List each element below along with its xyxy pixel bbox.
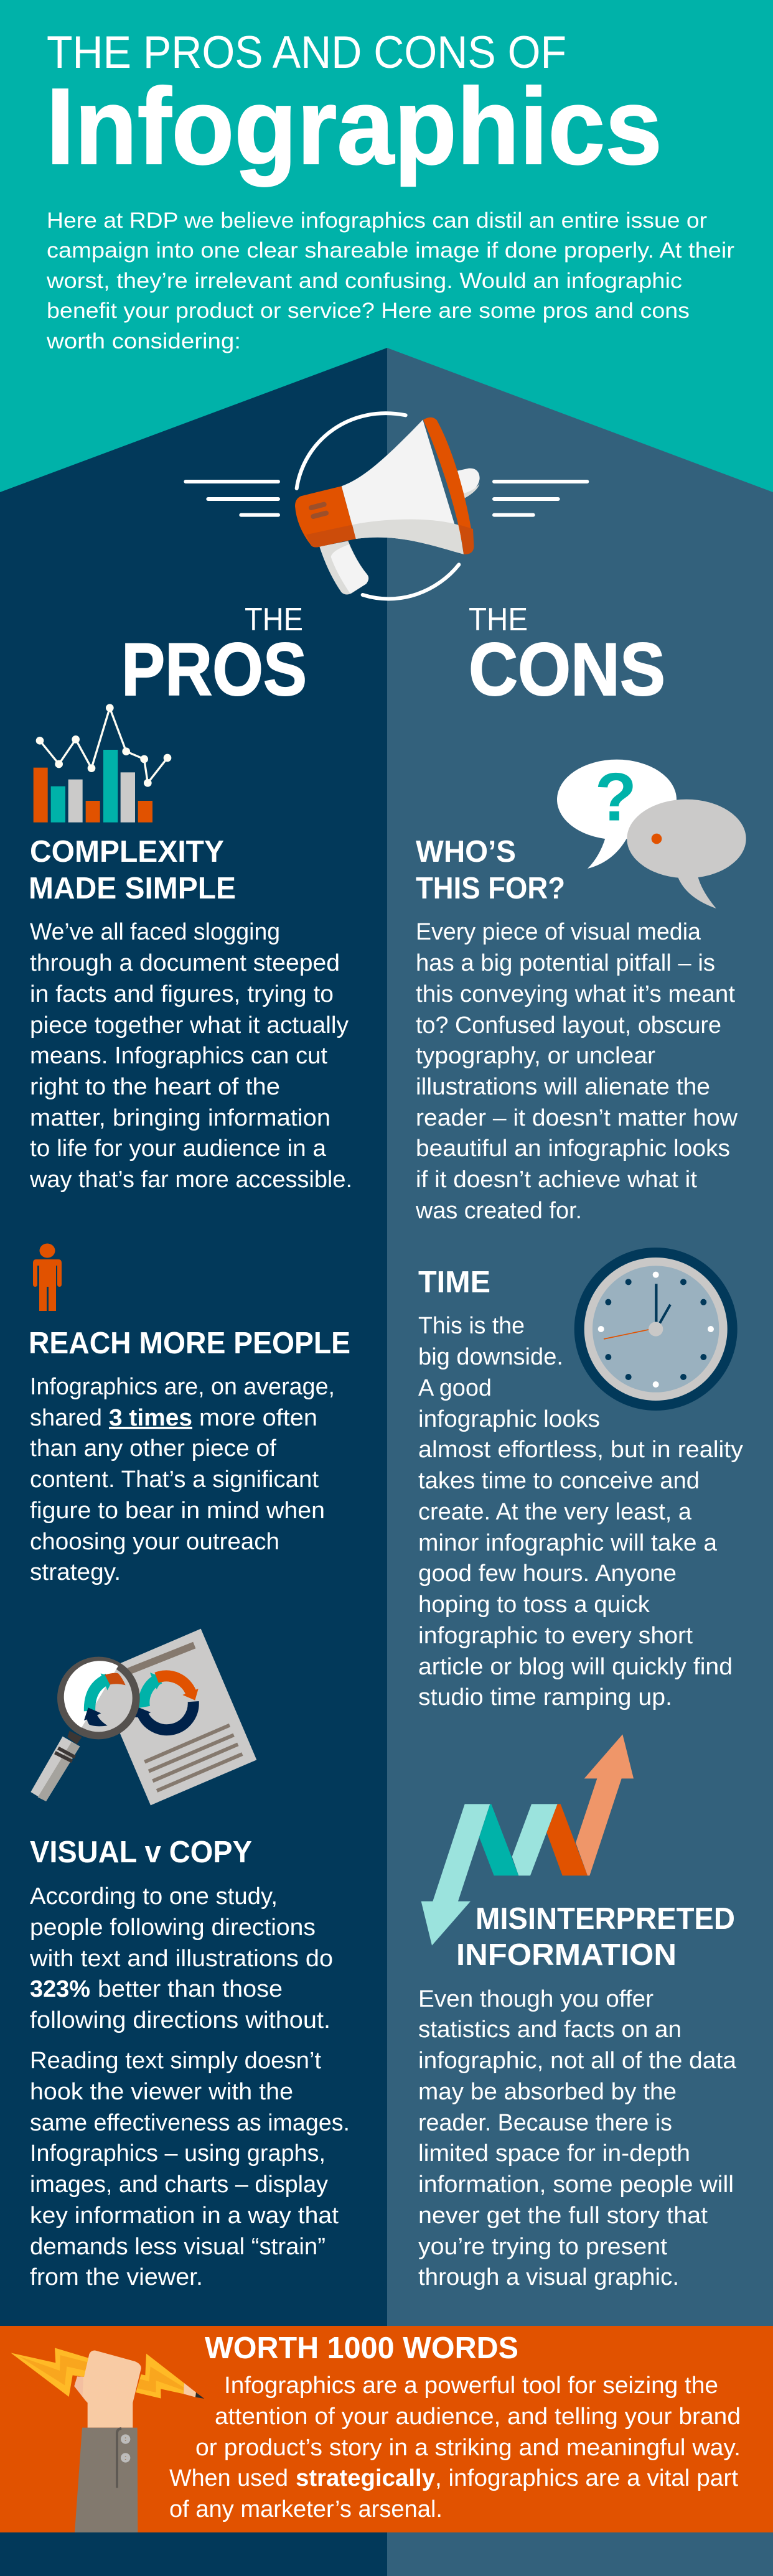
section: reach more people <box>29 1327 350 1585</box>
body text: strategically <box>296 2465 435 2491</box>
body text: from the viewer. <box>30 2264 203 2290</box>
heading: TIME <box>418 1266 490 1299</box>
body text: to life for your audience in a <box>30 1136 327 1162</box>
intro text block: campaign into one clear shareable image if done properly. At their <box>47 238 734 263</box>
heading: the pros: PROS <box>121 628 307 711</box>
body text: When used <box>169 2465 288 2491</box>
body text: in facts and figures, trying to <box>30 981 334 1007</box>
intro text block: benefit your product or service? Here are some pros and cons <box>47 299 690 323</box>
intro text block: worst, they’re irrelevant and confusing. Would an infographic <box>46 269 682 293</box>
intro text block <box>46 208 734 353</box>
body text: Reading text simply doesn’t <box>30 2048 321 2074</box>
body text: this conveying what it’s meant <box>416 981 735 1007</box>
icon: fist holding lightning pencil <box>11 2348 204 2532</box>
icon: speech bubbles: ? <box>595 759 637 836</box>
body text: , infographics are a vital part <box>435 2465 738 2491</box>
heading: MISINTERPRETED <box>476 1902 735 1936</box>
body text: illustrations will alienate the <box>416 1074 710 1100</box>
heading: COMPLEXITY <box>30 835 224 869</box>
body text: to? Confused layout, obscure <box>416 1012 721 1038</box>
body text: with text and illustrations do <box>29 1946 333 1972</box>
intro text block: Here at RDP we believe infographics can distil an entire issue or <box>47 208 707 233</box>
body text: choosing your outreach <box>30 1529 279 1555</box>
section: visual v copy <box>29 1836 350 2290</box>
body text: reader. Because there is <box>418 2110 672 2136</box>
body text: than any other piece of <box>30 1435 276 1462</box>
section: worth 1000 words <box>169 2331 741 2522</box>
body text <box>29 919 352 1193</box>
body text: shared <box>30 1405 102 1431</box>
heading: WORTH 1000 WORDS <box>205 2331 518 2365</box>
body text: more often <box>199 1405 317 1431</box>
body text: means. Infographics can cut <box>30 1043 327 1069</box>
body text: A good <box>418 1375 492 1401</box>
body text: statistics and facts on an <box>418 2017 682 2043</box>
body text: Every piece of visual media <box>416 919 701 945</box>
body text: through a document steeped <box>30 950 340 976</box>
heading <box>29 835 236 905</box>
body text: minor infographic will take a <box>418 1530 718 1556</box>
icon: clock <box>574 1248 738 1411</box>
panel: cons column background <box>387 0 773 2576</box>
body text: strategy. <box>30 1559 121 1585</box>
panel: teal header with chevron <box>0 0 773 492</box>
body text <box>169 2373 741 2522</box>
body text: hoping to toss a quick <box>418 1592 650 1618</box>
body text: figure to bear in mind when <box>30 1498 325 1524</box>
body text: takes time to conceive and <box>418 1468 700 1494</box>
body text: way that’s far more accessible. <box>29 1167 352 1193</box>
title line two: Infographics <box>46 65 662 187</box>
body text: good few hours. Anyone <box>418 1561 677 1587</box>
section: time <box>418 1266 743 1710</box>
section: complexity made simple <box>29 835 352 1193</box>
body text: According to one study, <box>30 1883 278 1910</box>
body text: This is the <box>418 1313 525 1339</box>
body text: has a big potential pitfall – is <box>416 950 715 976</box>
heading: WHO’S <box>416 835 516 869</box>
icon: magnifying glass over document <box>30 1629 256 1805</box>
title line one: THE PROS AND CONS OF <box>47 27 566 78</box>
icon: zigzag arrows <box>421 1734 634 1946</box>
body text: almost effortless, but in reality <box>418 1437 743 1463</box>
body text: you’re trying to present <box>418 2234 667 2260</box>
panel: pros column background <box>0 0 387 2576</box>
body text <box>418 1313 743 1710</box>
body text: Infographics are, on average, <box>30 1374 335 1400</box>
body text: typography, or unclear <box>416 1043 655 1069</box>
body text: infographic looks <box>418 1406 600 1432</box>
body text: information, some people will <box>418 2172 734 2198</box>
heading: INFORMATION <box>456 1938 677 1972</box>
heading: MADE SIMPLE <box>29 872 236 905</box>
body text: create. At the very least, a <box>418 1499 692 1525</box>
body text: right to the heart of the <box>30 1074 280 1100</box>
heading: THIS FOR? <box>416 872 565 905</box>
body text <box>29 1883 350 2290</box>
icon: speech bubbles <box>557 759 746 908</box>
body text: Infographics are a powerful tool for seizing the <box>224 2373 718 2399</box>
icon: bar and line chart <box>34 704 171 823</box>
body text: may be absorbed by the <box>418 2079 677 2105</box>
body text: was created for. <box>415 1198 582 1224</box>
body text: through a visual graphic. <box>418 2264 679 2290</box>
body text: attention of your audience, and telling your brand <box>215 2404 741 2430</box>
body text: Even though you offer <box>418 1986 654 2012</box>
body text: content. That’s a significant <box>30 1467 319 1493</box>
heading: the cons: THE <box>469 602 528 638</box>
heading: the pros: THE <box>245 602 303 638</box>
body text: 323% <box>30 1976 90 2002</box>
body text <box>30 1374 335 1585</box>
body text: if it doesn’t achieve what it <box>416 1167 697 1193</box>
body text: piece together what it actually <box>30 1012 349 1038</box>
body text: infographic, not all of the data <box>418 2048 737 2074</box>
body text: reader – it doesn’t matter how <box>416 1105 738 1131</box>
body text: same effectiveness as images. <box>30 2110 350 2136</box>
body text: matter, bringing information <box>30 1105 330 1131</box>
heading <box>456 1902 735 1972</box>
heading: VISUAL v COPY <box>30 1836 252 1869</box>
body text: studio time ramping up. <box>418 1684 672 1710</box>
body text: article or blog will quickly find <box>418 1654 733 1680</box>
body text: key information in a way that <box>30 2203 339 2229</box>
body text: people following directions <box>30 1915 316 1941</box>
body text: We’ve all faced slogging <box>30 919 280 945</box>
body text: big downside. <box>418 1344 563 1370</box>
body text: beautiful an infographic looks <box>416 1136 730 1162</box>
heading: the pros <box>121 602 307 711</box>
body text <box>415 919 738 1224</box>
body text: following directions without. <box>30 2007 330 2033</box>
body text: hook the viewer with the <box>30 2079 293 2105</box>
body text: of any marketer’s arsenal. <box>169 2496 443 2522</box>
heading <box>416 835 565 905</box>
icon: megaphone <box>185 413 587 599</box>
body text: limited space for in-depth <box>418 2140 690 2167</box>
body text: demands less visual “strain” <box>30 2234 326 2260</box>
body text: images, and charts – display <box>30 2172 328 2198</box>
title <box>46 27 662 187</box>
heading: the cons: CONS <box>469 628 665 711</box>
section: who's this for <box>415 835 738 1224</box>
body text: better than those <box>98 1976 283 2002</box>
body text: Infographics – using graphs, <box>30 2140 326 2167</box>
body text: or product’s story in a striking and meaningful way. <box>195 2435 741 2461</box>
panel: orange conclusion band <box>0 2326 773 2532</box>
intro text block: worth considering: <box>46 329 241 353</box>
heading: REACH MORE PEOPLE <box>29 1327 350 1360</box>
body text <box>418 1986 737 2290</box>
body text: infographic to every short <box>418 1623 693 1649</box>
icon: person <box>33 1243 62 1311</box>
section: misinterpreted information <box>418 1902 737 2290</box>
body text: 3 times <box>109 1405 192 1431</box>
body text: never get the full story that <box>418 2203 708 2229</box>
